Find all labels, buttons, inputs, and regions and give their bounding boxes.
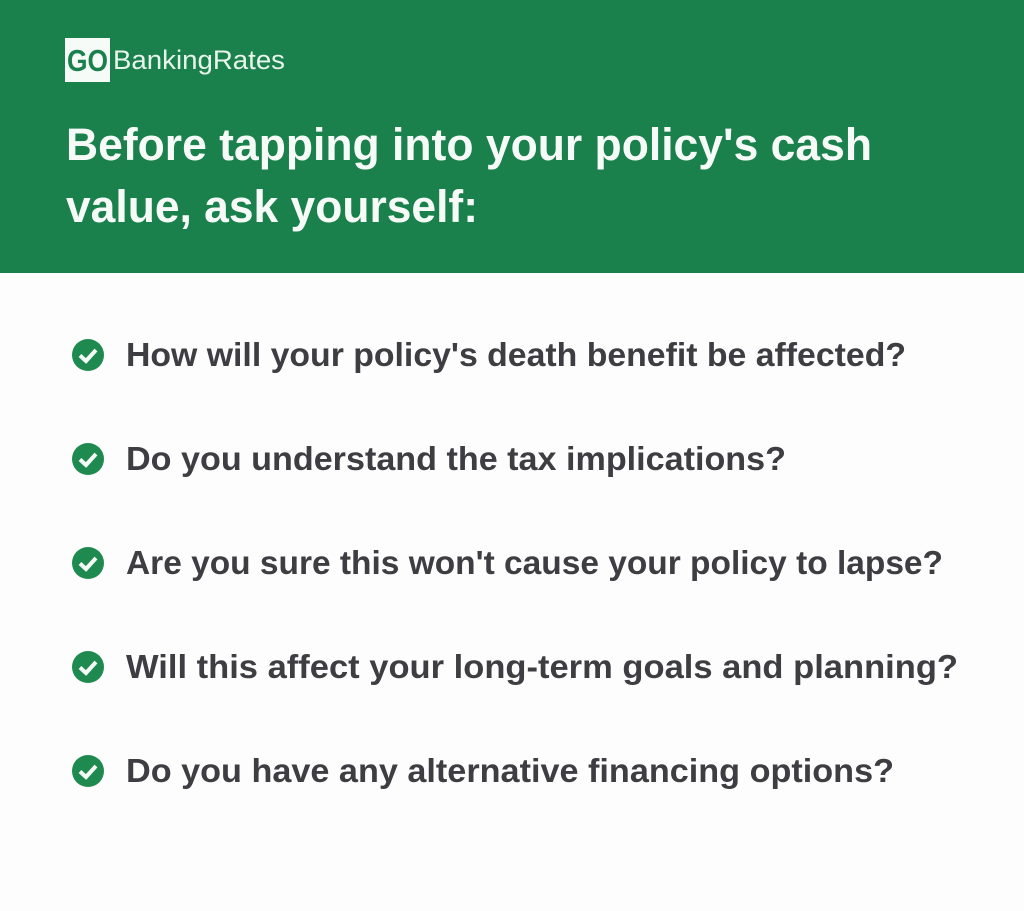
question text: Do you understand the tax implications? [126, 440, 786, 477]
logo: GOBankingRates: BankingRates [113, 45, 285, 75]
checklist [72, 336, 958, 789]
question text: How will your policy's death benefit be affected? [126, 336, 906, 373]
question text: Do you have any alternative financing options? [126, 752, 894, 789]
icon: check mark [72, 443, 104, 475]
item 5 [72, 752, 894, 789]
title [66, 119, 872, 232]
question text: Are you sure this won't cause your policy to lapse? [126, 544, 943, 581]
question text: Will this affect your long-term goals and planning? [126, 648, 958, 685]
item 3 [72, 544, 943, 581]
item 2 [72, 440, 786, 477]
icon: check mark [72, 339, 104, 371]
panel: green header [0, 0, 1024, 273]
item 1 [72, 336, 906, 373]
logo: GOBankingRates: GO [67, 43, 108, 78]
icon: check mark [72, 755, 104, 787]
item 4 [72, 648, 958, 685]
title: value, ask yourself: [66, 181, 478, 232]
icon: check mark [72, 547, 104, 579]
title: Before tapping into your policy's cash [66, 119, 872, 170]
icon: check mark [72, 651, 104, 683]
logo: GOBankingRates [65, 38, 285, 82]
